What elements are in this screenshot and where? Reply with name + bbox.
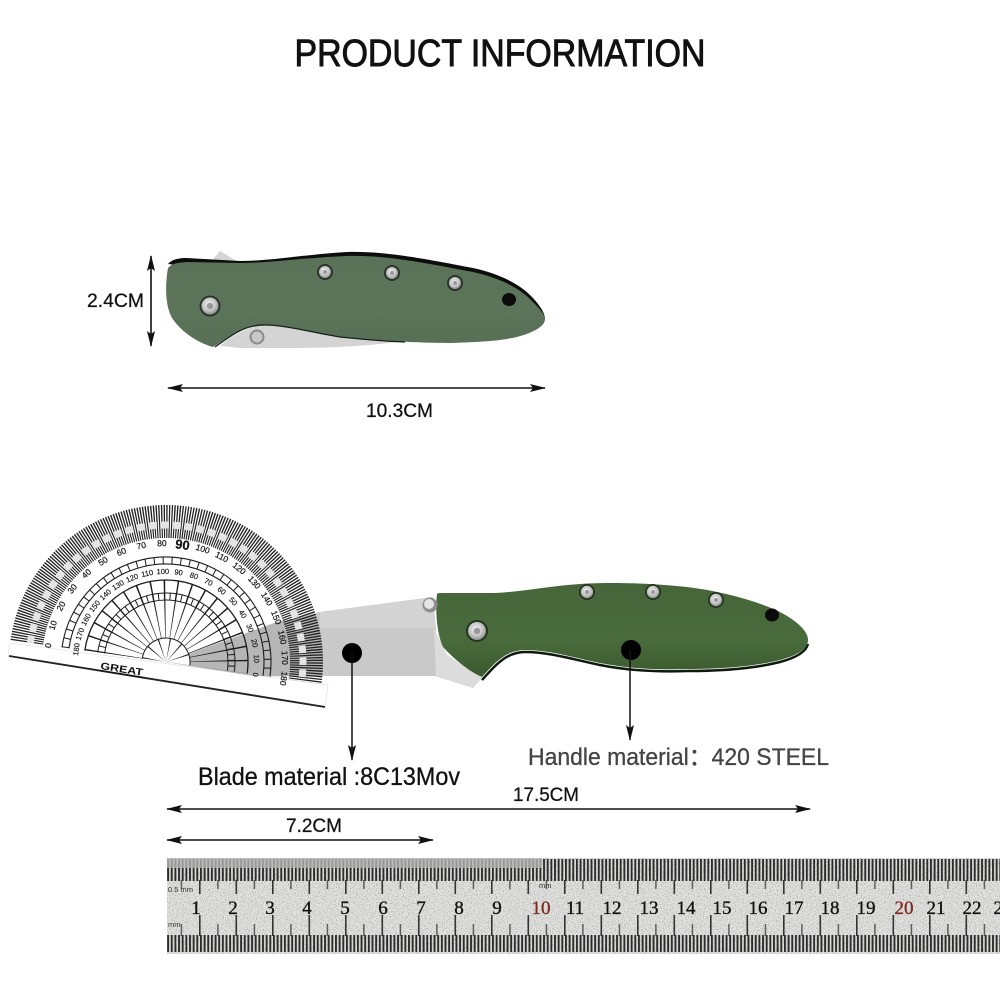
blade length dimension arrow [167,839,433,841]
inner degree numbers: 50 [227,595,239,608]
inner degree numbers: 60 [216,585,228,597]
closed knife handle [166,256,545,347]
outer square band [27,522,306,678]
outer degree numbers: 130 [246,574,263,591]
outer degree tick band [10,505,323,684]
inner degree numbers: 100 [156,567,169,576]
open length dimension arrow [167,808,810,810]
protractor base strip [8,643,328,707]
ruler speckle texture [167,858,1000,954]
radial spokes [106,602,226,722]
ruler top centimetre ticks [167,880,1000,894]
outer degree numbers: 0 [43,642,53,648]
ruler numbers [191,898,1000,919]
outer degree numbers: 120 [231,560,248,577]
ruler numbers: 17 [784,898,804,919]
outer degree numbers: 60 [115,545,128,558]
outer degree numbers: 140 [259,590,275,608]
middle square ring [62,556,272,677]
closed knife blade spine tip [210,251,240,263]
ruler body [167,858,1000,954]
protractor brand label: GREAT [100,661,144,679]
blade length label: 7.2CM [286,816,342,837]
ruler numbers: 13 [640,898,658,919]
outer degree numbers: 100 [194,542,211,556]
closed knife blade edge [220,323,405,348]
inner degree numbers: 170 [74,627,86,641]
ruler numbers: 2 [228,898,238,919]
ruler numbers: 15 [712,898,732,919]
outer degree numbers: 40 [80,567,93,580]
blade section under protractor [166,615,323,677]
outer degree numbers [42,520,306,687]
centre spokes [152,648,180,676]
ruler top worn band [167,858,542,868]
ruler bottom half-centimetre ticks [167,924,1000,936]
closed knife back edge [168,252,545,319]
height label: 2.4CM [87,291,144,312]
ruler numbers: 22 [962,898,982,919]
height dimension arrow [150,256,152,346]
inner arc [84,579,249,674]
ruler numbers: 5 [340,898,350,919]
protractor [10,505,323,686]
open knife pivot screw [466,620,488,642]
ruler unit labels: 0.5 mm [168,885,193,894]
open knife screw 3 [708,592,724,608]
open length label: 17.5CM [513,785,579,806]
ruler numbers: 7 [416,898,426,919]
outer degree numbers: 10 [47,619,59,631]
inner degree numbers: 80 [189,570,199,581]
ruler numbers: 4 [302,898,312,919]
lower edge line [215,325,405,347]
blade material label: Blade material :8C13Mov [198,763,460,791]
outer degree numbers: 160 [276,629,289,645]
outer degree numbers: 90 [174,536,191,553]
closed knife thumb stud [250,330,264,344]
inner square ring [97,592,236,672]
open knife screw 2 [645,584,661,600]
inner degree numbers: 140 [98,587,113,602]
outer degree numbers: 170 [280,651,290,665]
closed knife screw: pivot [200,296,220,316]
handle material label: Handle material：420 STEEL [528,744,829,771]
outer degree numbers: 180 [278,671,290,687]
ruler top half-centimetre ticks [167,880,1000,889]
ruler numbers: 3 [265,898,275,919]
inner degree numbers: 70 [203,576,214,588]
inner degree numbers: 120 [125,572,140,585]
inner degree numbers: 20 [249,638,260,648]
ruler unit labels: mm [168,920,180,929]
steel ruler [167,858,1000,954]
ruler numbers: 6 [378,898,388,919]
blade ricasso [434,628,482,688]
outer degree numbers: 70 [136,540,147,551]
inner degree numbers: 110 [140,568,154,579]
ruler numbers: 21 [926,898,946,919]
open knife handle [422,583,808,680]
inner degree numbers: 130 [110,578,126,592]
open knife screw 1 [579,584,595,600]
inner degree numbers: 160 [79,612,93,627]
open knife lanyard hole [765,608,779,622]
handle callout [621,640,641,740]
closed knife screw 3 [447,275,463,291]
closed length dimension arrow [168,387,545,389]
ruler numbers: 1 [191,898,201,919]
inner degree numbers: 30 [244,623,256,634]
ruler numbers: 10 [532,898,550,919]
closed length label: 10.3CM [366,401,433,422]
ruler numbers: 18 [820,898,840,919]
inner degree numbers: 10 [252,655,261,663]
blade callout [342,643,362,760]
blade upper flat [320,597,436,628]
closed knife screw 2 [384,265,400,281]
outer degree numbers: 110 [214,549,230,565]
protractor background [10,484,344,684]
inner degree numbers: 180 [71,643,82,656]
inner degree numbers: 0 [251,672,260,677]
outer degree numbers: 50 [96,554,110,568]
inner degree numbers [71,555,273,681]
outer degree numbers: 30 [65,582,79,596]
ruler numbers: 11 [566,898,584,919]
open handle body [436,583,808,677]
ruler numbers: 20 [894,898,914,919]
closed knife lanyard hole [502,293,516,306]
ruler numbers: 14 [676,898,696,919]
closed knife photo [166,251,545,348]
ruler bottom millimetre ticks [167,935,1000,952]
closed knife screw 1 [317,264,333,280]
outer degree numbers: 20 [54,599,68,613]
ruler bottom centimetre ticks [167,915,1000,936]
open knife thumb stud [422,598,438,612]
open knife blade [166,597,482,688]
ruler unit labels [168,881,552,929]
ruler numbers: 19 [856,898,876,919]
ruler top millimetre ticks [167,859,1000,881]
inner degree numbers: 150 [87,599,102,614]
inner degree numbers: 90 [174,567,183,577]
outer degree numbers: 150 [269,609,284,626]
centre arc [142,638,190,666]
title: PRODUCT INFORMATION [294,33,706,75]
ruler numbers: 9 [492,898,502,919]
inner degree numbers: 40 [237,608,249,620]
ruler numbers: 12 [602,898,622,919]
ruler numbers: 8 [454,898,464,919]
outer degree numbers: 80 [157,538,167,548]
ruler unit labels: mm [539,881,552,890]
open handle lower edge [482,644,808,680]
ruler numbers: 16 [748,898,768,919]
